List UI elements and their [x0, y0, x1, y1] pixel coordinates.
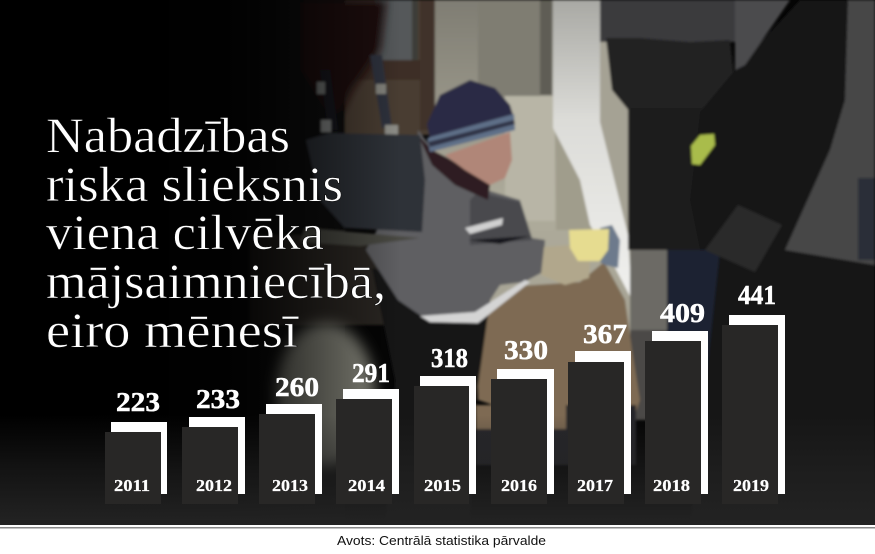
- jacket white hem: [420, 280, 530, 323]
- cup: [569, 229, 609, 261]
- second mitten: [600, 225, 620, 268]
- bar 2016: 2016: [501, 476, 537, 495]
- drain pipe: [553, 0, 632, 300]
- scarf: [418, 135, 490, 200]
- bar 2014: [336, 358, 399, 504]
- right foreground people: [598, 0, 875, 468]
- bar 2013: [259, 372, 322, 504]
- bar 2019: [722, 280, 785, 504]
- building wall: [432, 0, 632, 335]
- bar 2011: [105, 387, 167, 504]
- bar 2012: 2012: [196, 476, 232, 495]
- bar 2011: 2011: [114, 476, 150, 495]
- bottom dark overlay: [0, 415, 875, 525]
- bag: [306, 133, 425, 232]
- bar 2018: 409: [660, 298, 705, 328]
- bar 2015: 318: [431, 343, 468, 373]
- stone block: [478, 36, 540, 96]
- title: riska slieksnis: [46, 156, 343, 212]
- black trousers: [372, 268, 490, 468]
- bar 2015: [414, 343, 476, 504]
- source note: Avots: Centrālā statistika pārvalde: [337, 533, 546, 548]
- left dark overlay: [0, 0, 400, 525]
- boots: [476, 405, 636, 465]
- hat: [427, 80, 514, 140]
- ledge: [266, 235, 384, 326]
- jeans: [666, 248, 722, 366]
- bar 2013: 260: [275, 372, 319, 402]
- stone steps: [628, 248, 669, 332]
- bar 2014: 2014: [348, 476, 386, 495]
- bar 2017: 2017: [577, 476, 614, 495]
- jacket: [366, 130, 545, 322]
- bar 2016: 330: [504, 335, 548, 365]
- face: [445, 132, 512, 185]
- mitten: [541, 245, 590, 285]
- bar 2011: 223: [116, 387, 160, 417]
- bar 2019: 2019: [733, 476, 769, 495]
- title: eiro mēnesī: [46, 302, 299, 358]
- title: Nabadzības: [46, 107, 290, 163]
- bar 2018: 2018: [653, 476, 690, 495]
- title: mājsaimniecībā,: [46, 253, 386, 309]
- bar 2017: [568, 319, 631, 504]
- window frame: [340, 0, 435, 135]
- bar 2014: 291: [352, 358, 390, 388]
- left foreground person: [301, 0, 400, 232]
- bar 2019: 441: [738, 280, 776, 310]
- bar 2012: [182, 384, 245, 504]
- bar 2013: 2013: [272, 476, 308, 495]
- title: [46, 107, 386, 358]
- bar 2016: [491, 335, 554, 504]
- title: viena cilvēka: [46, 204, 324, 260]
- footer rule: [0, 527, 875, 528]
- right wall strip: [600, 40, 628, 218]
- bar 2015: 2015: [424, 476, 461, 495]
- bar 2018: [645, 298, 708, 504]
- background photo: man begging on the street: [146, 0, 875, 521]
- bar 2012: 233: [196, 384, 240, 414]
- bar chart: [105, 280, 785, 504]
- pale sack: [275, 323, 375, 467]
- bar 2017: 367: [583, 319, 627, 349]
- trousers: [476, 262, 641, 411]
